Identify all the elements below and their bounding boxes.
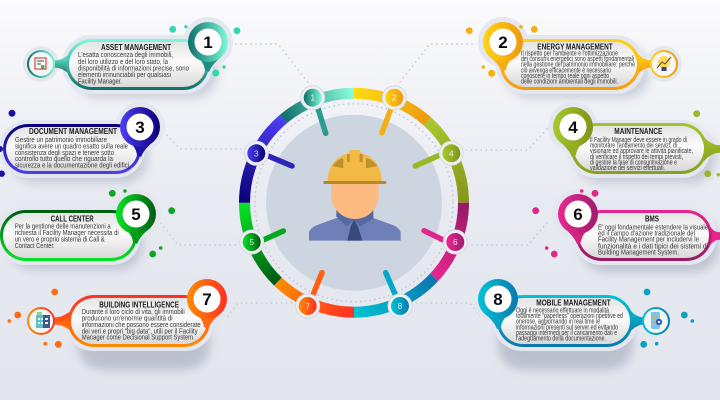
ring node 2: 2 [392,93,397,103]
body text [15,137,129,170]
body text: del loro utilizzo e del loro stato, la [78,59,168,66]
body text: ciò avvenga efficacemente è necessario [521,67,611,74]
body text: Building Management System. [598,250,679,257]
badge number: 4 [568,118,578,137]
heading: MOBILE MANAGEMENT [536,298,611,307]
dots [8,289,62,348]
badge number: 6 [573,205,583,224]
panel 1: asset management [23,17,240,98]
icon: asset sheet [35,58,46,69]
ring node 2 [382,86,406,110]
panel 8: mobile management [473,274,694,370]
heading: MAINTENANCE [614,127,663,136]
body text: richiesta il Facility Manager necessita di [15,230,119,237]
badge number: 8 [493,290,503,309]
dots [640,289,694,348]
body text: Facility Manager. [78,78,122,86]
body text: dei consumi energetici sono aspetti fondamentali [521,56,634,63]
body text: Gestire un patrimonio immobiliare [15,137,107,144]
body text: Manager come Decisional Support System. [82,335,195,342]
ring node 5 [240,230,264,254]
body text: di gestire la fase di consuntivazione e [590,160,677,166]
body text: informazioni che possono essere considerate [82,322,201,329]
ring node 6 [443,230,467,254]
panel 5: call center [0,189,175,270]
icon: phone and gear [651,312,662,329]
ring node 5: 5 [249,237,254,247]
connector and icon circle [52,310,72,332]
body text [82,309,201,342]
body text: Per la gestione delle manutenzioni a [15,223,111,230]
badge number: 3 [135,118,145,137]
body text [521,50,635,86]
body text: delle condizioni ambientali degli immobili. [521,79,618,86]
heading: ENERGY MANAGEMENT [537,43,613,52]
panel 4: maintenance [548,102,720,183]
badge number: 1 [203,33,213,52]
dots [109,189,175,257]
heading: ASSET MANAGEMENT [101,43,171,52]
dots [466,25,538,77]
ring node 4 [439,141,463,165]
body text: un vero e proprio sistema di Call & [15,236,105,243]
connector to off-page icon [708,224,720,248]
ring node 1: 1 [310,93,315,103]
connector and icon circle [637,53,654,75]
icon: light bulb with chart [657,56,671,71]
panel 7: building intelligence [8,274,232,370]
heading: CALL CENTER [51,215,94,224]
spokes [263,109,443,294]
body text: significa avere un quadro esatto sulla reale [15,144,128,150]
body text: producono un'enorme quantità di [82,315,173,322]
heading: DOCUMENT MANAGEMENT [29,127,117,136]
ring node 6: 6 [453,237,458,247]
badge number: 2 [498,33,508,52]
body text: disponibilità di informazioni precise, sono [78,66,189,72]
body text: validazione dei servizi effettuati. [590,165,665,172]
panel 2: energy management [466,17,682,98]
body text: Oggi è necessario effettuare in modalità [516,307,609,314]
body text: sicurezza e la documentazione degli edifici [15,162,129,170]
panel 6: BMS [532,189,720,272]
body text [516,307,623,343]
badge number: 7 [202,290,212,309]
body text: Il rispetto per l'ambiente e l'ottimizzazione [521,50,618,58]
ring node 7 [296,294,320,318]
body text: totalmente "paperless" operazioni ripetitive ed [516,313,623,320]
body text: controllo tutto quello che riguarda la [15,156,113,163]
body text: funzionalità e i dati tipici dei sistemi di [598,243,708,250]
body text: passaggi intermedi per il caricamento dati e [516,330,617,337]
body text: monitorare l'andamento dei servizi, di [590,142,677,150]
ring node 8: 8 [398,301,403,311]
icon: buildings [36,312,50,328]
dots [169,25,240,76]
dots [0,110,16,177]
ring node 7: 7 [305,301,310,311]
ring node 4: 4 [449,148,454,158]
dots [693,110,720,177]
inner disc [266,115,442,291]
body text: ed il campo d'azione tradizionale del [598,230,695,237]
body text [590,137,693,172]
body text [78,52,189,86]
connector to off-page icon [703,136,720,162]
ring node 8 [388,294,412,318]
heading: BMS [645,214,660,223]
body text [598,224,708,257]
body text: Contact Center. [15,243,55,250]
connector and icon circle [630,310,646,332]
dots [532,189,598,257]
body text: Facility Management per includervi le [598,237,699,244]
body text: consistenza degli spazi e tenere sotto [15,150,114,157]
central ring diagram [240,86,467,318]
body text: di verificare il rispetto dei tempi previsti, [590,154,683,161]
heading: BUILDING INTELLIGENCE [99,300,180,309]
ring node 3: 3 [254,148,259,158]
body text: informazioni presenti sul server ed evitando [516,324,618,331]
badge number: 5 [131,205,141,224]
body text: l'adeguamento della documentazione. [516,336,606,343]
body text [15,223,119,250]
body text: L'esatta conoscenza degli immobili, [78,52,173,59]
panel 3: document management [0,102,165,183]
body text: nella gestione del patrimonio immobiliare: perché [521,62,635,69]
body text: Il Facility Manager deve essere in grado di [590,137,687,144]
body text: Durante il loro ciclo di vita, gli immobili [82,309,185,316]
ring node 1 [301,86,325,110]
connector and icon circle [52,53,70,75]
coloured ring segments [244,93,464,312]
body text: dei veri e propri "big data", utili per il Facility [82,328,198,335]
body text: onerose, aggiornando in real time le [516,319,600,326]
body text: elementi irrinunciabili per qualsiasi [78,72,171,79]
body text: conoscere in tempo reale ogni aspetto [521,73,609,80]
icon: worker with hard hat [309,150,401,241]
ring node 3 [244,141,268,165]
